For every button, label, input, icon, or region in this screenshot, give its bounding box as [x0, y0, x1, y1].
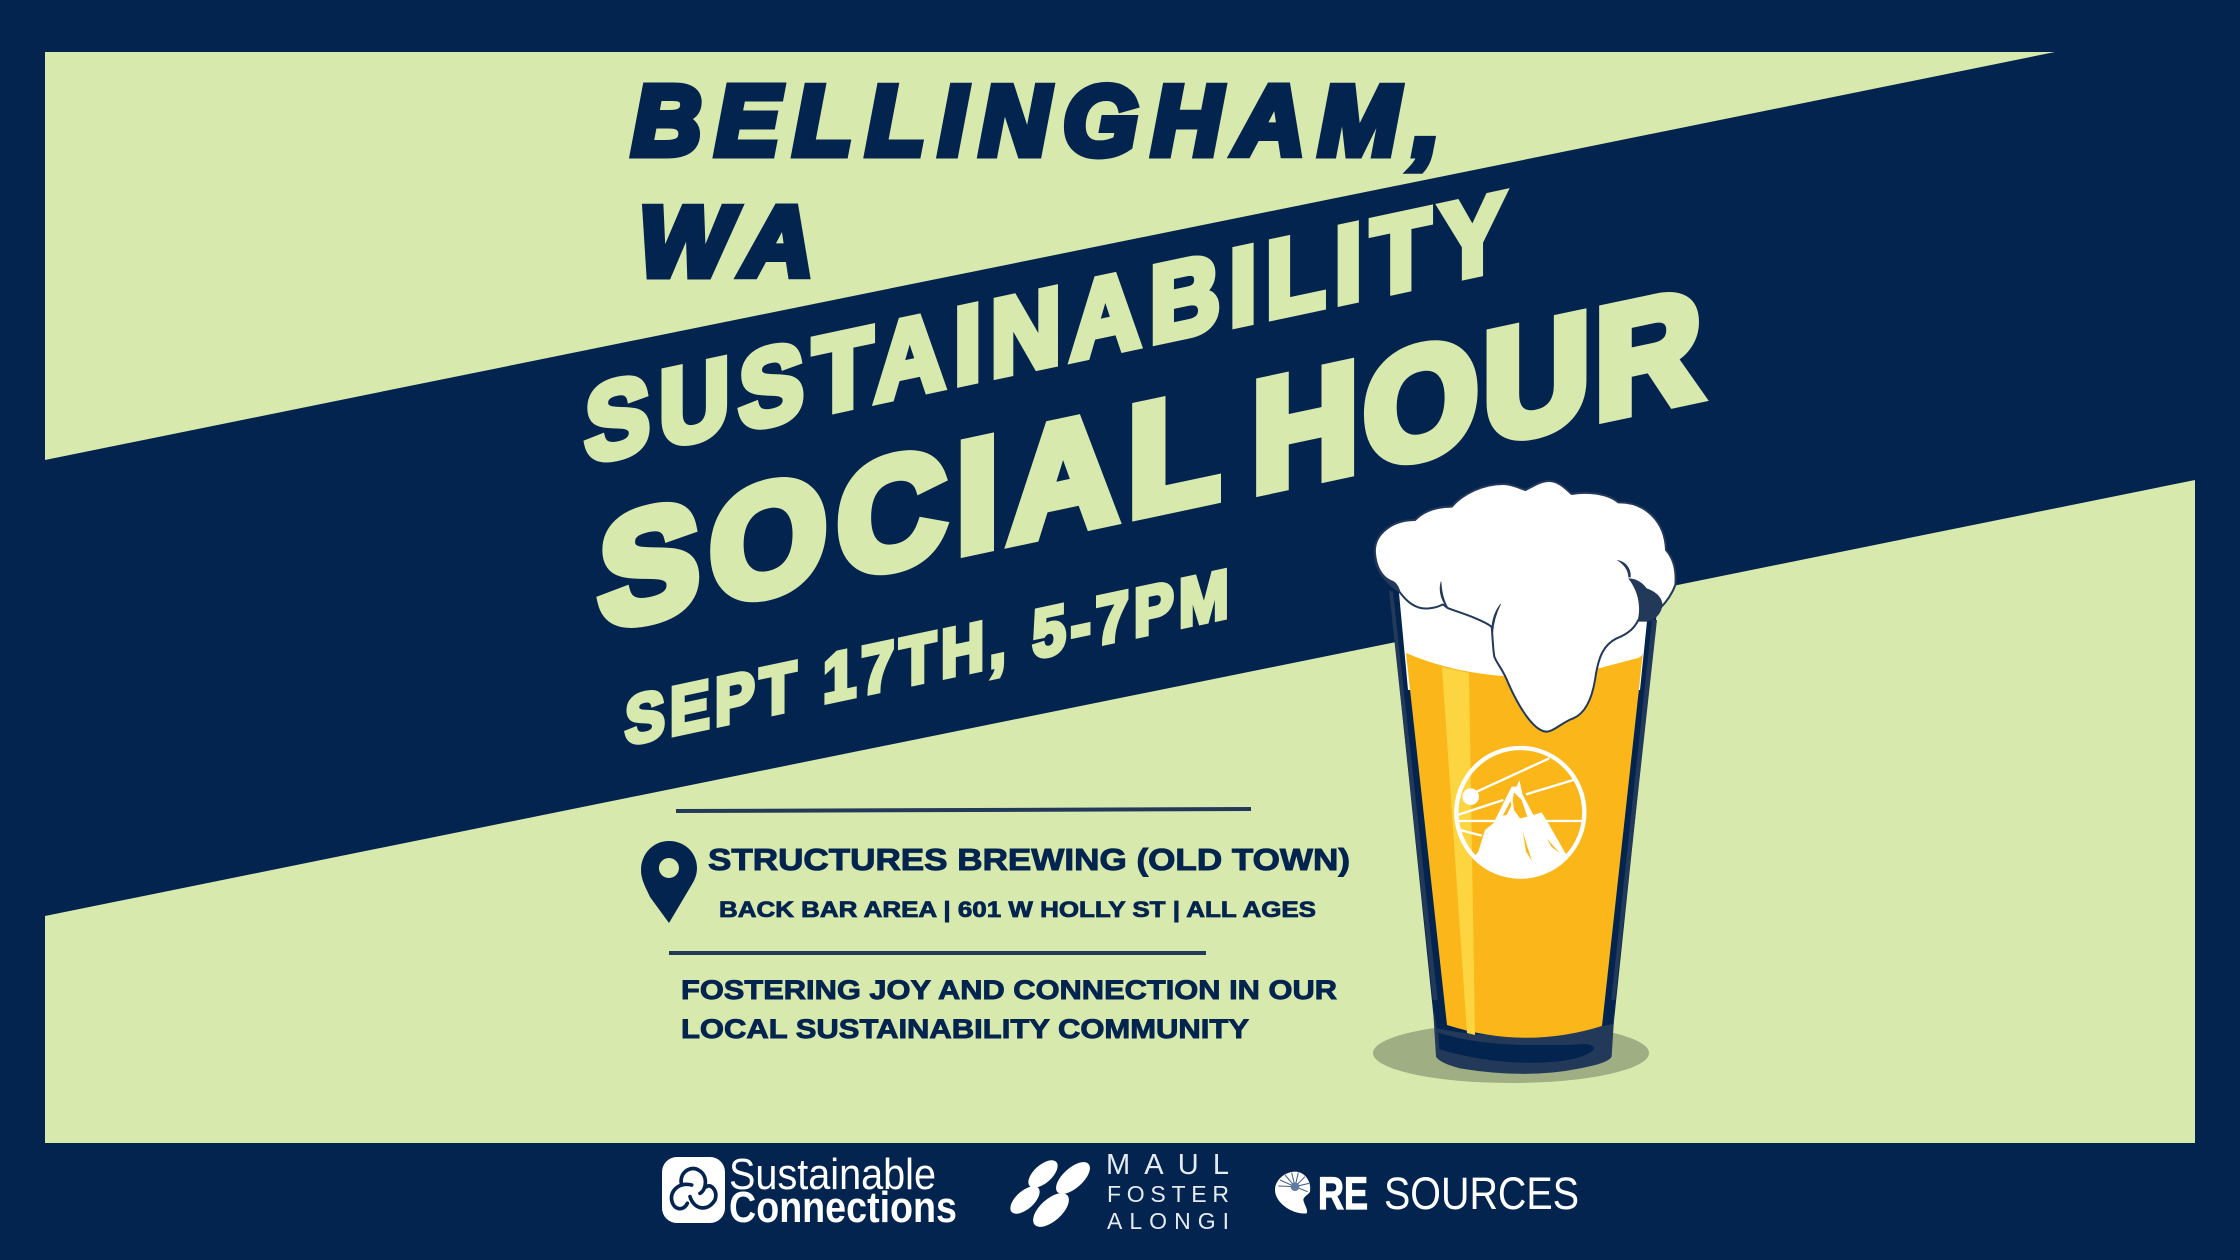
- logo: Maul Foster Alongi: FOSTER: [1107, 1181, 1229, 1207]
- title: sustainability: SUSTAINABILITY: [585, 170, 1505, 486]
- logo: RE Sources: SOURCES: [1384, 1168, 1579, 1219]
- logo: Maul Foster Alongi: MAUL: [1106, 1149, 1229, 1181]
- logo: RE Sources: [1275, 1168, 1579, 1219]
- logo: Sustainable Connections: Sustainable: [729, 1150, 936, 1199]
- title: social hour: HOUR: [1252, 257, 1701, 525]
- icon: location pin: [641, 841, 697, 923]
- icon: brewery logo: [1456, 748, 1584, 877]
- panel: bottom green area: [45, 480, 2195, 1143]
- divider line top: [676, 809, 1251, 811]
- foam: [1374, 481, 1676, 732]
- beer glass illustration: [1373, 481, 1676, 1083]
- heading: location: BELLINGHAM,: [632, 66, 1440, 176]
- logo: Maul Foster Alongi: [1006, 1149, 1229, 1234]
- venue text: STRUCTURES BREWING (OLD TOWN): [708, 842, 1350, 877]
- logo: RE Sources: RE: [1318, 1168, 1368, 1219]
- tagline: LOCAL SUSTAINABILITY COMMUNITY: [681, 1014, 1249, 1044]
- venue text: [708, 842, 1350, 922]
- divider line bottom: [669, 951, 1206, 955]
- logo: Sustainable Connections: Connections: [729, 1183, 957, 1232]
- panel: top green triangle: [45, 52, 2055, 460]
- heading: location: [632, 66, 1440, 296]
- venue text: BACK BAR AREA | 601 W HOLLY ST | ALL AGES: [719, 897, 1316, 922]
- glass base: [1433, 1000, 1615, 1074]
- date and time: SEPT 17TH, 5-7PM: [625, 555, 1229, 760]
- logo: Maul Foster Alongi: ALONGI: [1107, 1208, 1229, 1234]
- title: social hour: [599, 257, 1701, 662]
- heading: location: WA: [639, 186, 813, 296]
- tagline: [681, 975, 1337, 1044]
- title: social hour: SOCIAL: [599, 356, 1220, 662]
- logo: Sustainable Connections: [662, 1150, 957, 1232]
- tagline: FOSTERING JOY AND CONNECTION IN OUR: [681, 975, 1337, 1005]
